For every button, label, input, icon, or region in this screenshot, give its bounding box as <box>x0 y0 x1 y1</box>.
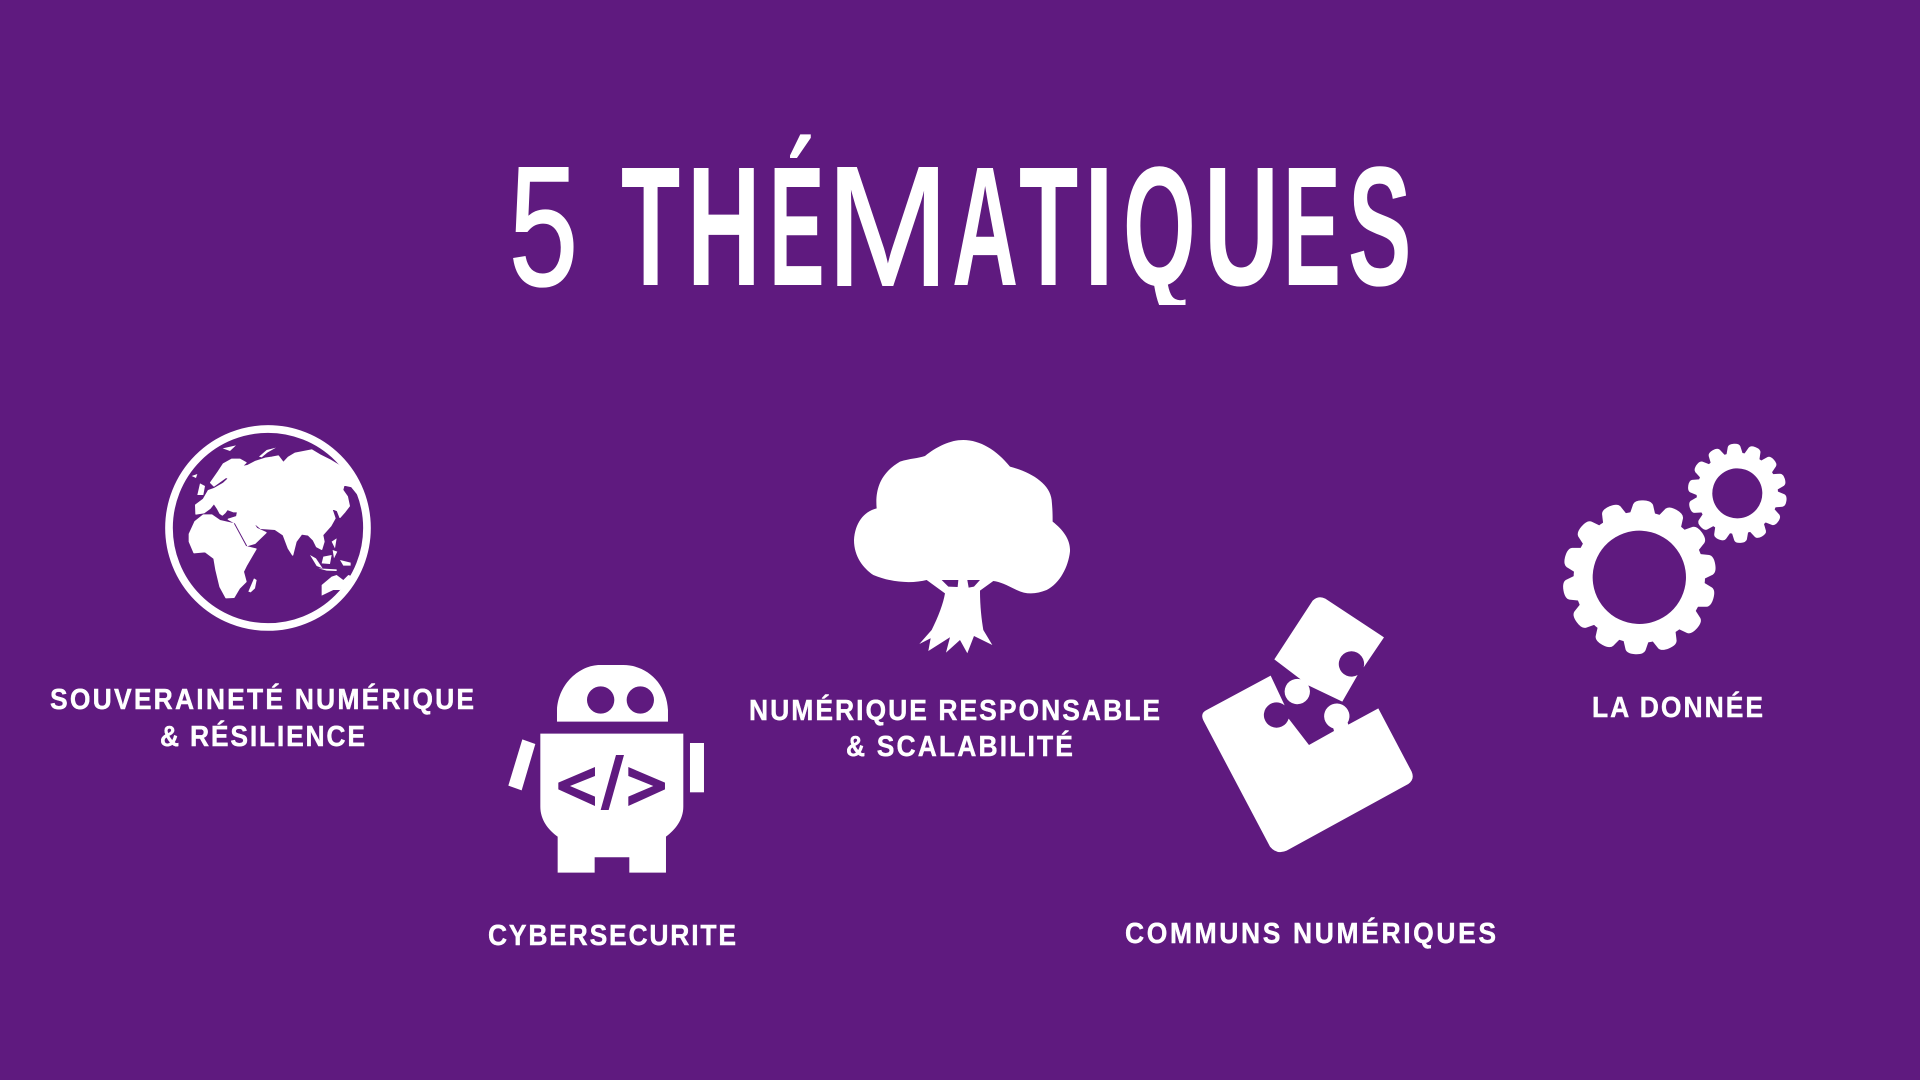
title: A <box>952 132 1018 322</box>
title: T <box>621 132 680 322</box>
title: T <box>1019 132 1078 322</box>
icon: puzzle pieces <box>1202 597 1413 852</box>
title: I <box>1084 132 1113 322</box>
label: cybersecurite: CYBERSECURITE <box>488 919 736 951</box>
title: H <box>687 132 761 322</box>
label: souveraineté: & RÉSILIENCE <box>160 720 365 752</box>
title: S <box>1348 132 1412 322</box>
label: la donnée: LA DONNÉE <box>1592 691 1763 723</box>
title: É <box>769 132 825 322</box>
title: 5 <box>509 132 578 322</box>
big gear <box>1558 496 1721 658</box>
title: U <box>1204 132 1279 322</box>
label: souveraineté <box>50 683 474 752</box>
title: Q <box>1123 132 1196 322</box>
icon: globe <box>169 429 367 627</box>
icon: tree <box>854 440 1070 653</box>
icon: gears <box>1558 440 1791 658</box>
icon: robot <box>508 665 704 873</box>
title <box>509 132 1412 322</box>
label: numérique responsable <box>749 694 1160 762</box>
label: souveraineté: SOUVERAINETÉ NUMÉRIQUE <box>50 683 474 715</box>
small gear <box>1684 440 1791 546</box>
label: numérique responsable: & SCALABILITÉ <box>846 730 1073 762</box>
title: M <box>826 132 949 322</box>
label: communs numériques: COMMUNS NUMÉRIQUES <box>1125 917 1496 949</box>
title: E <box>1283 132 1341 322</box>
label: numérique responsable: NUMÉRIQUE RESPONSABLE <box>749 694 1160 726</box>
